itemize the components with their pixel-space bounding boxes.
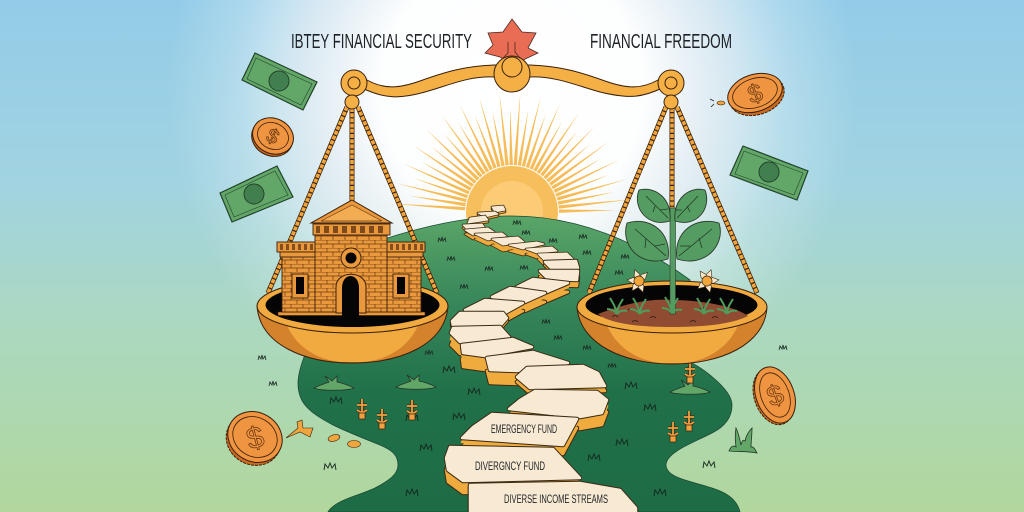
arched door xyxy=(336,274,366,318)
flower right xyxy=(696,269,719,293)
scale beam xyxy=(341,56,684,97)
coin upper left xyxy=(246,111,299,163)
windows xyxy=(292,274,308,298)
stone: emergency fund xyxy=(462,414,577,445)
red star ornament xyxy=(485,19,538,64)
heading: left: IBTEY FINANCIAL SECURITY xyxy=(291,31,472,53)
heading: right: FINANCIAL FREEDOM xyxy=(590,31,732,53)
left scale chains xyxy=(268,95,437,293)
soil xyxy=(598,300,748,327)
stone: diverse income streams xyxy=(470,483,636,512)
stone: divergncy fund xyxy=(446,447,580,481)
green hill xyxy=(298,216,740,512)
plant with leaves xyxy=(607,189,737,314)
bank building xyxy=(277,200,425,318)
stepping stone path xyxy=(446,206,636,512)
left pivot xyxy=(341,70,367,96)
banknote lower left xyxy=(220,166,293,222)
coin lower right xyxy=(745,361,803,430)
coin upper left: $ xyxy=(263,125,282,149)
right bowl xyxy=(577,281,767,364)
stone: divergncy fund: DIVERGNCY FUND xyxy=(475,459,545,473)
sprouts xyxy=(607,297,737,314)
grass tufts xyxy=(258,220,787,496)
right wing xyxy=(387,242,425,312)
coin lower left: $ xyxy=(243,420,268,457)
round window xyxy=(341,248,361,268)
coin lower right: $ xyxy=(763,378,788,413)
stone: emergency fund: EMERGENCY FUND xyxy=(491,422,557,436)
coin fragments xyxy=(286,99,725,448)
coin upper right: $ xyxy=(744,78,766,109)
stone: diverse income streams: DIVERSE INCOME STREAMS xyxy=(504,492,608,506)
left wing xyxy=(277,242,316,312)
leaf lower right xyxy=(677,221,720,261)
left bowl xyxy=(257,279,448,363)
flower left xyxy=(627,269,650,293)
coin lower left xyxy=(217,402,291,475)
right scale chains xyxy=(589,95,757,293)
base xyxy=(278,312,425,316)
leaf lower left xyxy=(626,221,668,261)
center pivot xyxy=(494,56,530,92)
right pivot xyxy=(658,70,684,96)
leaf upper left xyxy=(637,189,670,222)
small plants and orange sprouts on hill xyxy=(314,363,757,453)
sun with rays xyxy=(393,93,631,258)
coin upper right xyxy=(723,66,789,123)
banknote right xyxy=(730,146,808,200)
banknote top left xyxy=(242,53,317,110)
leaf upper right xyxy=(675,189,707,222)
central block xyxy=(311,200,392,312)
